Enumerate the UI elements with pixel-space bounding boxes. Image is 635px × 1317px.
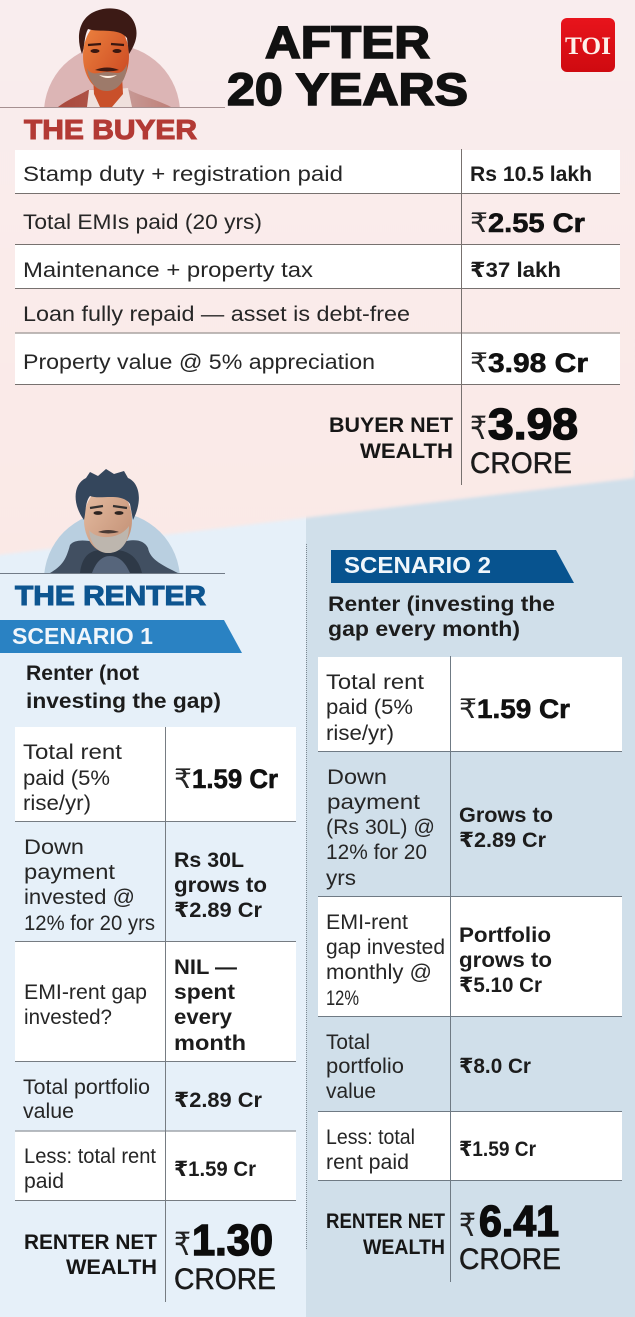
title: 20 YEARS xyxy=(227,64,468,115)
callout: renter net wealth scenario 1: RENTER NET xyxy=(24,1231,157,1254)
row: down payment: ₹2.89 Cr xyxy=(459,829,546,852)
row: down payment: 12% for 20 xyxy=(326,841,427,864)
row: EMI-rent gap: every xyxy=(174,1006,232,1029)
callout: renter net wealth scenario 2: RENTER NET xyxy=(326,1210,445,1233)
row: total portfolio: value xyxy=(326,1080,376,1103)
row: down payment: Rs 30L xyxy=(174,849,244,872)
callout: renter net wealth scenario 2 xyxy=(326,1197,561,1276)
callout: buyer net wealth xyxy=(329,400,578,480)
heading: the buyer: THE BUYER xyxy=(24,114,197,145)
row: property value xyxy=(23,348,589,378)
row: total rent xyxy=(326,671,571,745)
callout: buyer net wealth: WEALTH xyxy=(360,440,453,463)
row: total portfolio: ₹8.0 Cr xyxy=(459,1055,531,1078)
row: total rent xyxy=(23,741,278,815)
callout: renter net wealth scenario 2: WEALTH xyxy=(363,1236,445,1259)
subheading: scenario 2: Renter (investing the xyxy=(328,593,555,616)
row: EMI-rent gap xyxy=(24,956,246,1055)
callout: renter net wealth scenario 1: ₹ xyxy=(174,1226,191,1262)
row: down payment xyxy=(326,766,553,890)
row: less rent: Less: total rent xyxy=(24,1145,156,1168)
row: down payment: payment xyxy=(327,791,420,814)
callout: renter net wealth scenario 2: 6.41 xyxy=(479,1197,559,1246)
title: AFTER xyxy=(265,17,430,68)
subheading: scenario 2 xyxy=(328,593,555,641)
banner: scenario 2 xyxy=(331,550,574,583)
row: total portfolio: portfolio xyxy=(326,1055,404,1078)
subheading: scenario 2: gap every month) xyxy=(328,618,520,641)
row: stamp duty: Stamp duty + registration paid xyxy=(23,163,343,186)
row: EMI-rent gap: NIL — xyxy=(174,956,237,979)
row: maintenance: ₹37 lakh xyxy=(470,259,561,282)
row: down payment: (Rs 30L) @ xyxy=(326,816,435,839)
row: property value: 3.98 Cr xyxy=(488,348,589,378)
row: total EMIs: ₹ xyxy=(470,208,488,238)
row: EMI-rent gap: grows to xyxy=(459,949,552,972)
row: EMI-rent gap: ₹5.10 Cr xyxy=(459,974,542,997)
row: loan repaid: Loan fully repaid — asset is debt-free xyxy=(23,303,410,326)
row: property value: Property value @ 5% appreciation xyxy=(23,351,375,374)
heading: the renter: THE RENTER xyxy=(15,580,206,611)
row: EMI-rent gap: monthly @ xyxy=(326,961,432,984)
subheading: scenario 1: investing the gap) xyxy=(26,690,221,713)
row: down payment: grows to xyxy=(174,874,267,897)
row: less rent: Less: total xyxy=(326,1126,415,1149)
row: less rent xyxy=(24,1145,256,1193)
icon: TOI logo xyxy=(561,18,615,72)
callout: buyer net wealth: ₹ xyxy=(470,410,487,446)
row: total rent: ₹ xyxy=(174,764,192,794)
row: down payment: Down xyxy=(327,766,387,789)
row: down payment xyxy=(24,836,267,935)
subheading: scenario 1: Renter (not xyxy=(26,662,139,685)
table: scenario 1 xyxy=(15,727,296,1302)
banner: scenario 2: SCENARIO 2 xyxy=(344,552,491,578)
row: maintenance: Maintenance + property tax xyxy=(23,259,314,282)
row: EMI-rent gap: Portfolio xyxy=(459,924,551,947)
icon: TOI logo: TOI xyxy=(565,33,611,60)
row: down payment: 12% for 20 yrs xyxy=(24,912,155,935)
row: maintenance xyxy=(23,259,561,282)
table: scenario 2 xyxy=(318,656,622,1282)
row: down payment: Down xyxy=(24,836,84,859)
row: EMI-rent gap: 12% xyxy=(326,987,359,1010)
row: total portfolio xyxy=(326,1031,531,1103)
row: EMI-rent gap: invested? xyxy=(24,1006,112,1029)
row: total rent: 1.59 Cr xyxy=(192,764,278,794)
row: EMI-rent gap xyxy=(326,911,552,1010)
row: less rent: ₹1.59 Cr xyxy=(459,1138,536,1161)
divider: renter portrait baseline xyxy=(0,572,225,574)
icon: renter portrait xyxy=(44,469,180,573)
row: total rent: ₹ xyxy=(459,694,477,724)
row: EMI-rent gap: month xyxy=(174,1032,246,1055)
callout: renter net wealth scenario 1 xyxy=(24,1216,276,1296)
row: EMI-rent gap: spent xyxy=(174,981,235,1004)
subheading: scenario 1 xyxy=(26,662,221,713)
row: property value: ₹ xyxy=(470,348,488,378)
callout: renter net wealth scenario 1: WEALTH xyxy=(66,1256,157,1279)
row: total rent: paid (5% xyxy=(23,767,110,790)
panel: scenario 2 xyxy=(318,550,622,1282)
row: total portfolio: value xyxy=(23,1100,74,1123)
callout: renter net wealth scenario 2: CRORE xyxy=(459,1243,561,1276)
callout: buyer net wealth: CRORE xyxy=(470,447,572,480)
panel: buyer table xyxy=(15,149,620,485)
callout: renter net wealth scenario 1: CRORE xyxy=(174,1263,276,1296)
row: stamp duty xyxy=(23,163,592,186)
row: total rent: Total rent xyxy=(326,671,424,694)
divider: buyer portrait baseline xyxy=(0,106,225,108)
row: less rent: rent paid xyxy=(326,1151,409,1174)
row: less rent: ₹1.59 Cr xyxy=(174,1158,256,1181)
row: total rent: rise/yr) xyxy=(326,722,394,745)
row: total portfolio: ₹2.89 Cr xyxy=(174,1089,262,1112)
panel: scenario 1 xyxy=(0,620,296,1302)
row: total portfolio: Total portfolio xyxy=(23,1076,150,1099)
row: down payment: yrs xyxy=(326,867,356,890)
row: EMI-rent gap: EMI-rent xyxy=(326,911,408,934)
row: less rent: paid xyxy=(24,1170,64,1193)
row: total rent: rise/yr) xyxy=(23,792,91,815)
row: down payment: invested @ xyxy=(24,886,135,909)
callout: buyer net wealth: 3.98 xyxy=(488,400,578,449)
callout: buyer net wealth: BUYER NET xyxy=(329,414,453,437)
row: total EMIs: 2.55 Cr xyxy=(488,208,586,238)
row: total rent: Total rent xyxy=(23,741,122,764)
icon: buyer portrait xyxy=(44,8,180,107)
row: total portfolio xyxy=(23,1076,262,1123)
row: total rent: paid (5% xyxy=(326,696,413,719)
row: down payment: payment xyxy=(24,861,115,884)
row: total rent: 1.59 Cr xyxy=(477,694,571,724)
row: EMI-rent gap: EMI-rent gap xyxy=(24,981,147,1004)
row: less rent xyxy=(326,1126,536,1174)
row: total portfolio: Total xyxy=(326,1031,370,1054)
callout: renter net wealth scenario 2: ₹ xyxy=(459,1207,476,1243)
banner: scenario 1: SCENARIO 1 xyxy=(12,623,153,649)
row: total EMIs: Total EMIs paid (20 yrs) xyxy=(23,211,262,234)
row: EMI-rent gap: gap invested xyxy=(326,936,445,959)
row: down payment: Grows to xyxy=(459,804,553,827)
title xyxy=(227,17,468,115)
row: stamp duty: Rs 10.5 lakh xyxy=(470,163,592,186)
row: total EMIs xyxy=(23,208,586,238)
banner: scenario 1 xyxy=(0,620,242,653)
row: down payment: ₹2.89 Cr xyxy=(174,899,262,922)
callout: renter net wealth scenario 1: 1.30 xyxy=(192,1216,273,1265)
